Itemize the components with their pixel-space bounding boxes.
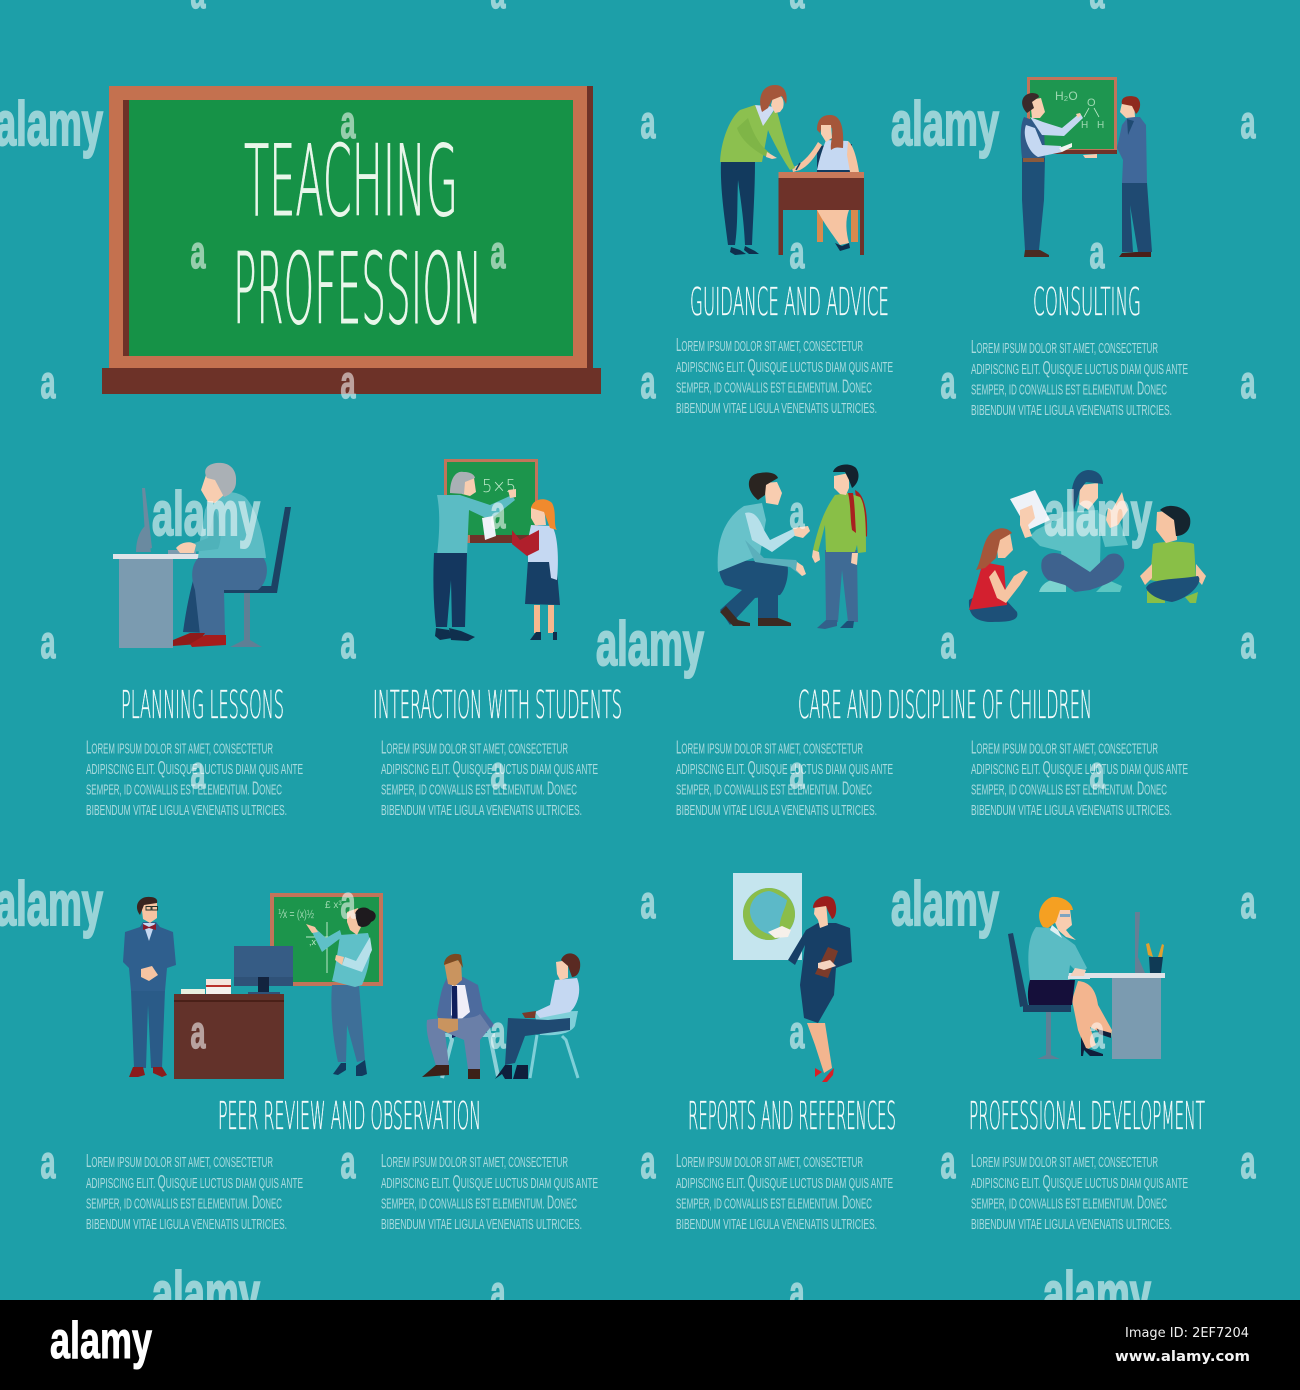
- watermarks: a: [640, 96, 656, 148]
- text: GUIDANCE AND ADVICE: [690, 280, 889, 324]
- text block: consulting: SEMPER, ID CONVALLIS EST ELEMENTUM. DONEC: [971, 378, 1167, 398]
- illustration: interaction with students: [433, 459, 560, 641]
- text block: care and discipline left: ADIPISCING ELIT. QUISQUE LUCTUS DIAM QUIS ANTE: [676, 758, 893, 778]
- watermarks: alamy: [891, 90, 999, 159]
- text block: professional development: ADIPISCING ELIT. QUISQUE LUCTUS DIAM QUIS ANTE: [971, 1172, 1188, 1192]
- text block: planning lessons: LOREM IPSUM DOLOR SIT AMET, CONSECTETUR: [86, 738, 273, 758]
- watermarks: a: [790, 1006, 805, 1058]
- illustration: peer review and observation: £ x³: [325, 900, 342, 911]
- text block: reports and references: [676, 1151, 893, 1233]
- watermarks: a: [40, 1136, 56, 1188]
- watermarks: a: [790, 1266, 805, 1318]
- text block: planning lessons: [86, 738, 303, 819]
- text block: guidance and advice: LOREM IPSUM DOLOR SIT AMET, CONSECTETUR: [676, 335, 863, 355]
- watermarks: a: [1240, 356, 1256, 408]
- text block: care and discipline right: [971, 738, 1188, 819]
- text block: peer review left: SEMPER, ID CONVALLIS EST ELEMENTUM. DONEC: [86, 1192, 282, 1212]
- text block: consulting: ADIPISCING ELIT. QUISQUE LUCTUS DIAM QUIS ANTE: [971, 358, 1188, 378]
- text block: guidance and advice: [676, 335, 893, 417]
- watermarks: a: [40, 616, 56, 668]
- text block: peer review right: SEMPER, ID CONVALLIS EST ELEMENTUM. DONEC: [381, 1192, 577, 1212]
- watermarks: a: [490, 746, 506, 798]
- footer bar: [0, 1300, 1300, 1390]
- footer logo: alamy: [50, 1312, 152, 1370]
- illustration: peer review and observation: ,x: [309, 937, 317, 947]
- text: INTERACTION WITH STUDENTS: [373, 683, 622, 727]
- text block: guidance and advice: BIBENDUM VITAE LIGULA VENENATIS ULTRICIES.: [676, 401, 877, 417]
- watermarks: alamy: [891, 870, 999, 939]
- text block: planning lessons: BIBENDUM VITAE LIGULA VENENATIS ULTRICIES.: [86, 803, 287, 819]
- footer website: www.alamy.com: [1115, 1349, 1250, 1365]
- watermarks: a: [640, 356, 656, 408]
- chalkboard title panel: PROFESSION: [233, 233, 482, 347]
- text block: interaction with students: ADIPISCING ELIT. QUISQUE LUCTUS DIAM QUIS ANTE: [381, 758, 598, 778]
- text block: care and discipline left: SEMPER, ID CONVALLIS EST ELEMENTUM. DONEC: [676, 778, 872, 798]
- text block: interaction with students: [381, 738, 598, 819]
- text block: reports and references: SEMPER, ID CONVALLIS EST ELEMENTUM. DONEC: [676, 1192, 872, 1212]
- watermarks: alamy: [596, 610, 704, 679]
- text block: interaction with students: LOREM IPSUM DOLOR SIT AMET, CONSECTETUR: [381, 738, 568, 758]
- illustration: care and discipline, man and boy: [718, 465, 867, 629]
- text: PEER REVIEW AND OBSERVATION: [218, 1094, 481, 1138]
- text block: peer review right: BIBENDUM VITAE LIGULA VENENATIS ULTRICIES.: [381, 1217, 582, 1233]
- text block: reports and references: BIBENDUM VITAE LIGULA VENENATIS ULTRICIES.: [676, 1217, 877, 1233]
- text: PLANNING LESSONS: [121, 683, 284, 727]
- text block: peer review right: ADIPISCING ELIT. QUISQUE LUCTUS DIAM QUIS ANTE: [381, 1172, 598, 1192]
- illustration: consulting: H: [1097, 120, 1104, 131]
- text block: guidance and advice: ADIPISCING ELIT. QUISQUE LUCTUS DIAM QUIS ANTE: [676, 356, 893, 376]
- watermarks: a: [790, 746, 805, 798]
- text block: reports and references: LOREM IPSUM DOLOR SIT AMET, CONSECTETUR: [676, 1151, 863, 1171]
- watermarks: alamy: [152, 1260, 260, 1329]
- watermarks: a: [1090, 226, 1105, 278]
- watermarks: a: [490, 486, 506, 538]
- illustration: care and discipline, reading circle: [969, 470, 1206, 622]
- watermarks: a: [340, 1136, 356, 1188]
- watermarks: a: [790, 226, 805, 278]
- watermarks: a: [340, 616, 356, 668]
- text block: planning lessons: ADIPISCING ELIT. QUISQUE LUCTUS DIAM QUIS ANTE: [86, 758, 303, 778]
- text block: interaction with students: SEMPER, ID CONVALLIS EST ELEMENTUM. DONEC: [381, 778, 577, 798]
- illustration: consulting: [1021, 77, 1152, 257]
- watermarks: a: [490, 1006, 506, 1058]
- text block: professional development: SEMPER, ID CONVALLIS EST ELEMENTUM. DONEC: [971, 1192, 1167, 1212]
- watermarks: alamy: [1043, 1260, 1151, 1329]
- watermarks: a: [940, 1136, 956, 1188]
- text block: peer review left: [86, 1151, 303, 1233]
- watermarks: a: [1090, 746, 1105, 798]
- illustration: interaction with students: 5×5: [482, 476, 516, 497]
- watermarks: a: [1240, 616, 1256, 668]
- illustration: peer review and observation: [123, 893, 580, 1079]
- illustration: reports and references: [733, 873, 852, 1082]
- watermarks: a: [940, 616, 956, 668]
- text block: care and discipline right: ADIPISCING ELIT. QUISQUE LUCTUS DIAM QUIS ANTE: [971, 758, 1188, 778]
- illustration: consulting: O: [1087, 97, 1096, 109]
- text block: reports and references: ADIPISCING ELIT. QUISQUE LUCTUS DIAM QUIS ANTE: [676, 1172, 893, 1192]
- text block: professional development: [971, 1151, 1188, 1233]
- watermarks: a: [1240, 1136, 1256, 1188]
- illustration: peer review and observation: ⅟x = (x)½: [278, 907, 314, 921]
- watermarks: a: [190, 226, 206, 278]
- text block: peer review left: LOREM IPSUM DOLOR SIT AMET, CONSECTETUR: [86, 1151, 273, 1171]
- illustration: professional development: [1008, 897, 1165, 1059]
- watermarks: a: [790, 486, 805, 538]
- text: REPORTS AND REFERENCES: [688, 1094, 896, 1138]
- watermarks: a: [340, 96, 356, 148]
- text block: peer review right: LOREM IPSUM DOLOR SIT AMET, CONSECTETUR: [381, 1151, 568, 1171]
- illustration: guidance and advice: [720, 85, 864, 255]
- text block: consulting: [971, 337, 1188, 419]
- watermarks: a: [340, 876, 356, 928]
- text block: guidance and advice: SEMPER, ID CONVALLIS EST ELEMENTUM. DONEC: [676, 376, 872, 396]
- watermarks: a: [340, 356, 356, 408]
- text block: care and discipline left: [676, 738, 893, 819]
- watermarks: alamy: [0, 90, 103, 159]
- text block: care and discipline left: LOREM IPSUM DOLOR SIT AMET, CONSECTETUR: [676, 738, 863, 758]
- chalkboard title panel: TEACHING: [244, 125, 458, 239]
- text block: planning lessons: SEMPER, ID CONVALLIS EST ELEMENTUM. DONEC: [86, 778, 282, 798]
- illustration: consulting: H: [1081, 120, 1088, 131]
- watermarks: a: [1240, 96, 1256, 148]
- watermarks: a: [490, 226, 506, 278]
- text block: peer review left: BIBENDUM VITAE LIGULA VENENATIS ULTRICIES.: [86, 1217, 287, 1233]
- text block: peer review right: [381, 1151, 598, 1233]
- watermarks: alamy: [152, 480, 260, 549]
- watermarks: alamy: [0, 870, 103, 939]
- text block: care and discipline right: SEMPER, ID CONVALLIS EST ELEMENTUM. DONEC: [971, 778, 1167, 798]
- watermarks: a: [490, 1266, 506, 1318]
- text block: peer review left: ADIPISCING ELIT. QUISQUE LUCTUS DIAM QUIS ANTE: [86, 1172, 303, 1192]
- watermarks: alamy: [1044, 480, 1152, 549]
- watermarks: a: [940, 356, 956, 408]
- watermarks: a: [190, 746, 206, 798]
- footer image id: Image ID: 2EF7204: [1125, 1325, 1249, 1341]
- chalkboard title panel: [102, 86, 601, 394]
- watermarks: a: [1240, 876, 1256, 928]
- text: CONSULTING: [1033, 280, 1141, 324]
- watermarks: a: [1090, 1006, 1105, 1058]
- illustration: consulting: H₂O: [1055, 89, 1078, 103]
- text block: care and discipline left: BIBENDUM VITAE LIGULA VENENATIS ULTRICIES.: [676, 803, 877, 819]
- watermarks: a: [190, 1006, 206, 1058]
- text block: interaction with students: BIBENDUM VITAE LIGULA VENENATIS ULTRICIES.: [381, 803, 582, 819]
- watermarks: a: [40, 356, 56, 408]
- illustration: planning lessons: [113, 463, 291, 648]
- watermarks: a: [640, 1136, 656, 1188]
- watermarks: a: [640, 876, 656, 928]
